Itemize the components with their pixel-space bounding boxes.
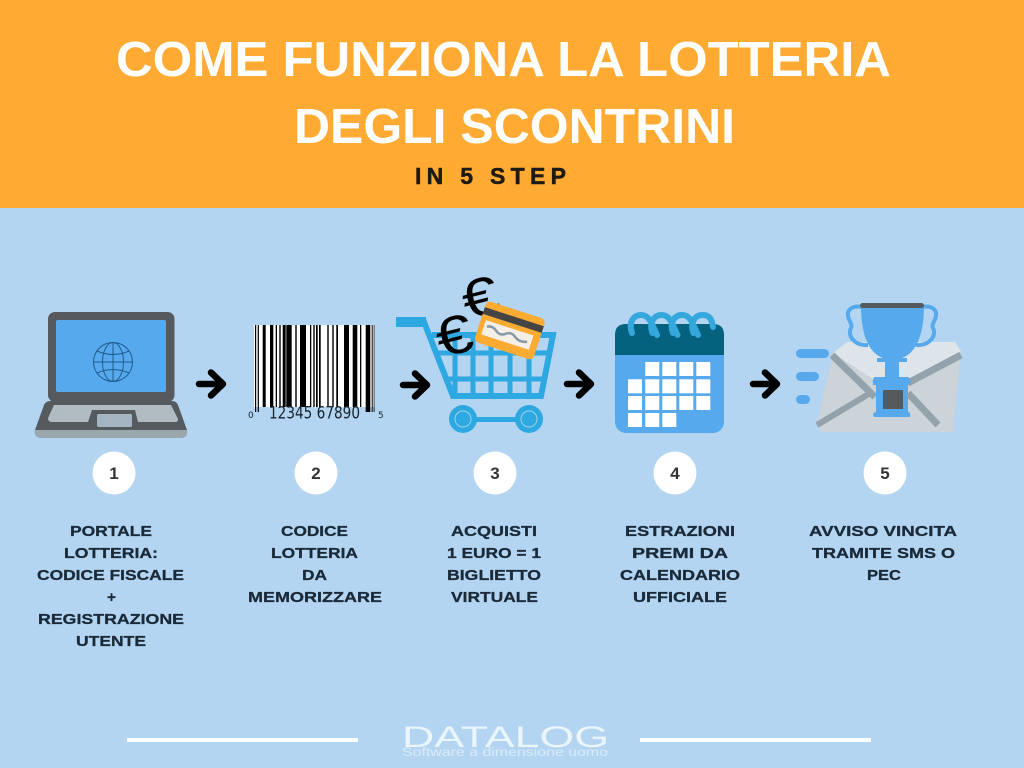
step 2 text <box>248 523 382 606</box>
step 1 text: CODICE FISCALE <box>37 567 184 584</box>
step 1 text: LOTTERIA: <box>64 545 158 562</box>
step 2 text: MEMORIZZARE <box>248 589 382 606</box>
step 1 text <box>37 523 184 650</box>
step 1 text: + <box>107 589 116 606</box>
header band <box>0 0 1024 208</box>
icon: credit card <box>474 300 546 361</box>
step 4: 4 <box>670 464 680 483</box>
step 2 text: DA <box>302 567 327 584</box>
icon: shopping cart <box>396 264 553 433</box>
step 5 text: AVVISO VINCITA <box>809 523 957 540</box>
step 3 text <box>447 523 541 606</box>
title: DEGLI SCONTRINI <box>294 100 735 154</box>
icon: calendar <box>615 315 724 433</box>
arrow 4 <box>753 372 777 396</box>
step 5 <box>809 452 957 584</box>
euro symbol back: € <box>455 264 505 331</box>
step 1 text: UTENTE <box>76 633 146 650</box>
logo: DATALOG <box>402 721 609 754</box>
step 3: 3 <box>490 464 500 483</box>
icon: barcode <box>248 325 384 422</box>
step 1 <box>37 452 184 650</box>
step 5 text <box>809 523 957 584</box>
step 1: 1 <box>109 464 119 483</box>
title <box>116 33 891 154</box>
icon: barcode: 12345 67890 <box>269 404 360 422</box>
step 3 text: BIGLIETTO <box>447 567 541 584</box>
title: COME FUNZIONA LA LOTTERIA <box>116 33 891 87</box>
step 2: 2 <box>311 464 321 483</box>
icon: barcode: 0 <box>248 411 254 421</box>
footer <box>127 721 871 759</box>
step 1 text: PORTALE <box>70 523 152 540</box>
step 3 text: 1 EURO = 1 <box>447 545 541 562</box>
step 3 <box>447 452 541 606</box>
icon: barcode: 5 <box>378 411 384 421</box>
envelope <box>817 342 961 432</box>
logo: Software a dimensione uomo <box>402 747 608 759</box>
trophy <box>848 303 936 417</box>
step 4 text: UFFICIALE <box>633 589 727 606</box>
step 4 text: PREMI DA <box>632 545 728 562</box>
euro symbol front: € <box>429 302 479 369</box>
step 5 text: PEC <box>867 567 901 584</box>
step 5: 5 <box>880 464 890 483</box>
step 4 <box>620 452 740 606</box>
step 2 text: LOTTERIA <box>271 545 358 562</box>
subtitle: IN 5 STEP <box>415 163 566 189</box>
arrow 2 <box>403 374 427 396</box>
step 4 text <box>620 523 740 606</box>
step 3 text: VIRTUALE <box>451 589 538 606</box>
speed lines <box>796 349 829 404</box>
arrow 3 <box>567 372 591 396</box>
icon: laptop <box>35 312 187 438</box>
step 2 text: CODICE <box>281 523 348 540</box>
step 1 text: REGISTRAZIONE <box>38 611 184 628</box>
icon: globe <box>94 342 132 382</box>
step 5 text: TRAMITE SMS O <box>812 545 955 562</box>
step 4 text: ESTRAZIONI <box>625 523 735 540</box>
step 3 text: ACQUISTI <box>451 523 537 540</box>
icon: envelope with trophy <box>796 303 961 432</box>
step 2 <box>248 452 382 606</box>
step 4 text: CALENDARIO <box>620 567 740 584</box>
arrow 1 <box>199 372 223 396</box>
logo <box>402 721 609 759</box>
